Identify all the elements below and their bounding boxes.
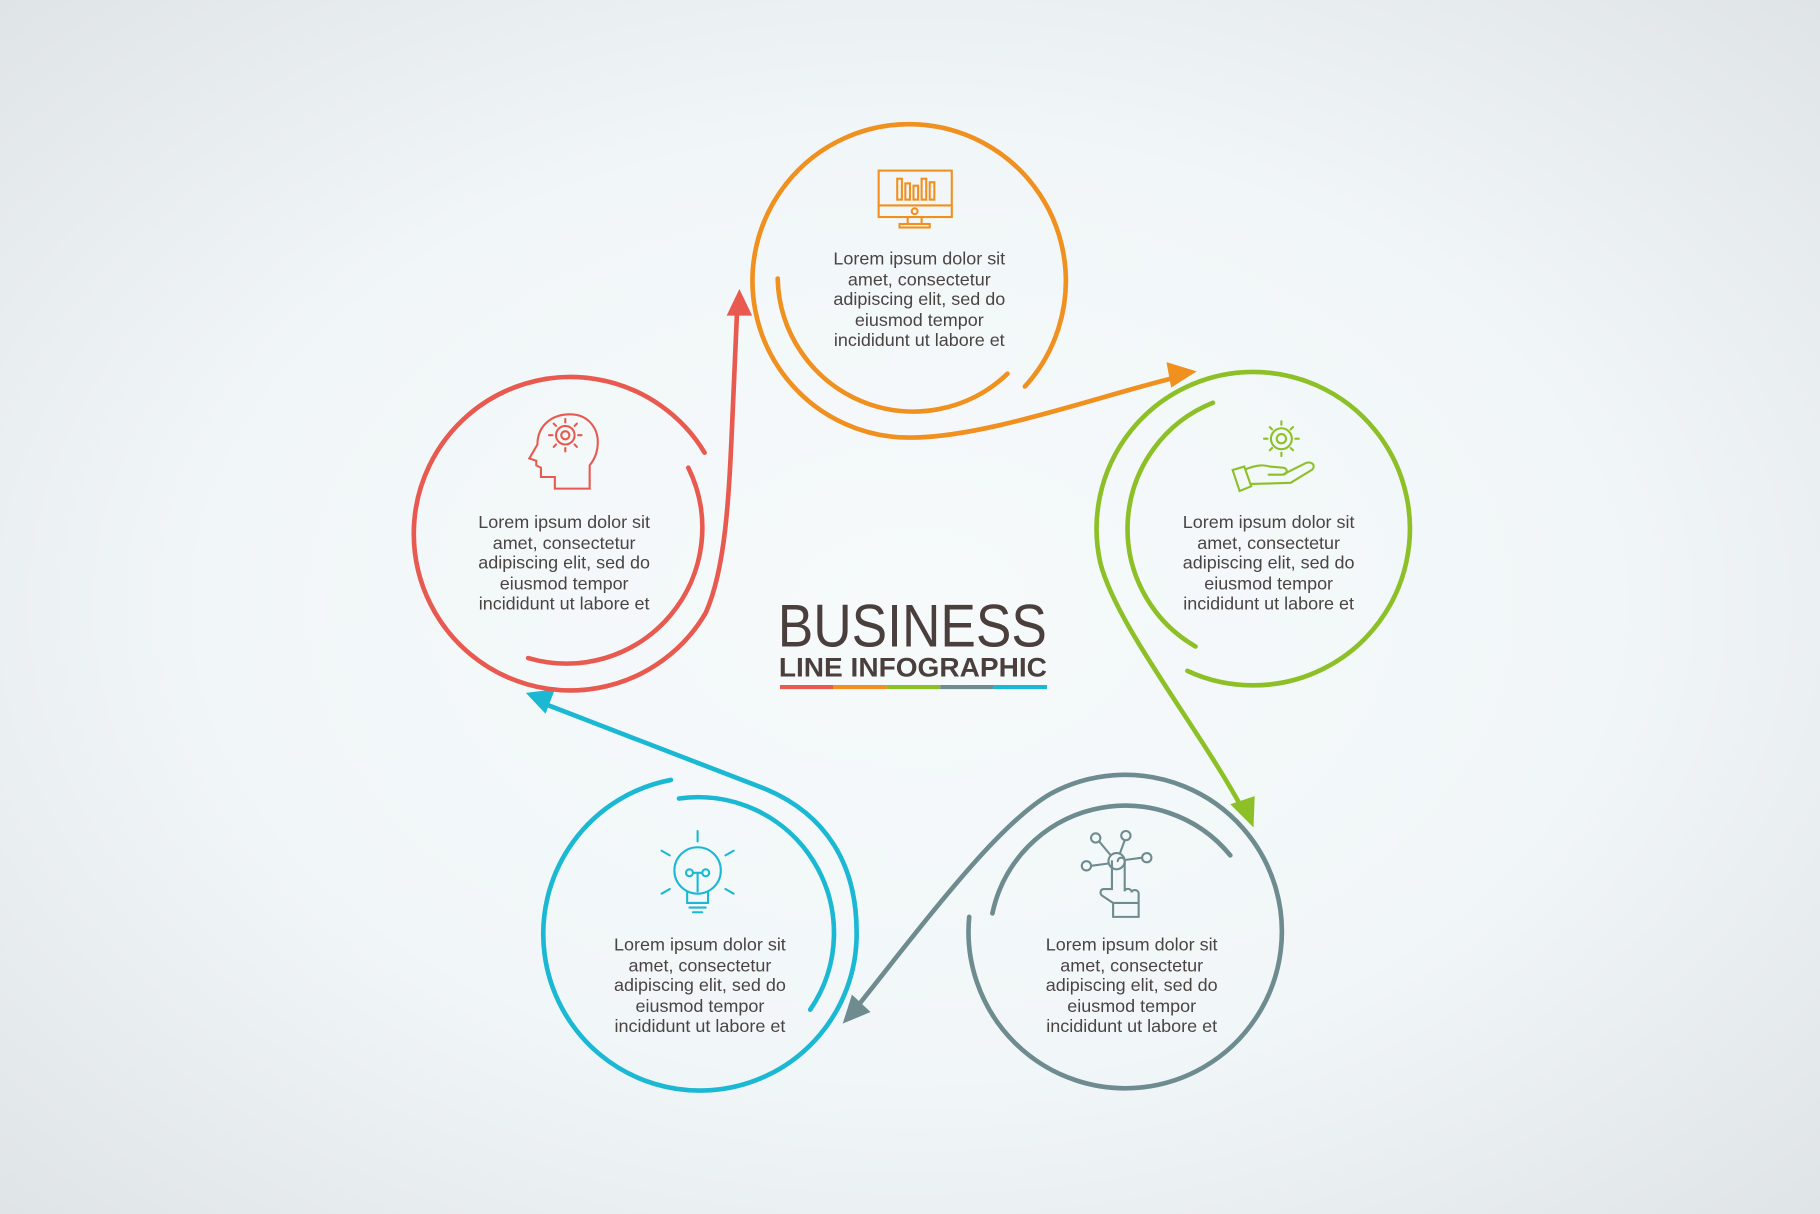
text: gray: incididunt ut labore et: [1046, 1016, 1217, 1036]
text: orange: incididunt ut labore et: [834, 330, 1005, 350]
text: cyan: adipiscing elit, sed do: [614, 975, 786, 995]
panel: orange step: [752, 124, 1197, 438]
text: red: incididunt ut labore et: [479, 593, 650, 613]
text: green: Lorem ipsum dolor sit: [1183, 512, 1355, 532]
icon: monitor chart: [879, 171, 952, 227]
text: cyan: Lorem ipsum dolor sit: [614, 935, 786, 955]
title: [778, 591, 1047, 687]
text: cyan: incididunt ut labore et: [615, 1016, 785, 1036]
color bar: [780, 685, 1047, 689]
panel: gray step: [843, 775, 1282, 1088]
text: green: eiusmod tempor: [1204, 574, 1333, 594]
text: green: amet, consectetur: [1197, 533, 1340, 553]
text: green: incididunt ut labore et: [1183, 593, 1354, 613]
text: gray: amet, consectetur: [1060, 955, 1203, 975]
text: orange: eiusmod tempor: [855, 310, 984, 330]
text: red: amet, consectetur: [493, 533, 636, 553]
text: orange: amet, consectetur: [848, 270, 991, 290]
panel: red step: [414, 289, 752, 690]
text: cyan: eiusmod tempor: [636, 996, 764, 1016]
icon: head with gear: [529, 414, 598, 489]
text: orange: adipiscing elit, sed do: [833, 289, 1005, 309]
arrow: red: [727, 289, 752, 316]
panel: cyan step: [526, 689, 857, 1091]
text: gray: Lorem ipsum dolor sit: [1046, 935, 1218, 955]
text: red: eiusmod tempor: [500, 574, 629, 594]
icon: hand with gear: [1233, 421, 1314, 491]
arrow: green: [1230, 796, 1255, 828]
text: gray: eiusmod tempor: [1067, 996, 1196, 1016]
text: gray: adipiscing elit, sed do: [1046, 975, 1218, 995]
title: BUSINESS: [778, 591, 1047, 659]
text: green: adipiscing elit, sed do: [1183, 553, 1355, 573]
arrow: orange: [1166, 362, 1197, 388]
text: orange: Lorem ipsum dolor sit: [833, 249, 1005, 269]
icon: touch network: [1082, 831, 1151, 917]
panel: green step: [1097, 372, 1410, 828]
icon: light bulb: [662, 831, 734, 912]
text: cyan: amet, consectetur: [629, 955, 771, 975]
text: red: Lorem ipsum dolor sit: [478, 512, 650, 532]
subtitle: LINE INFOGRAPHIC: [779, 653, 1047, 683]
text: red: adipiscing elit, sed do: [478, 553, 650, 573]
arrow: gray: [843, 995, 871, 1024]
arrow: cyan: [526, 689, 555, 714]
